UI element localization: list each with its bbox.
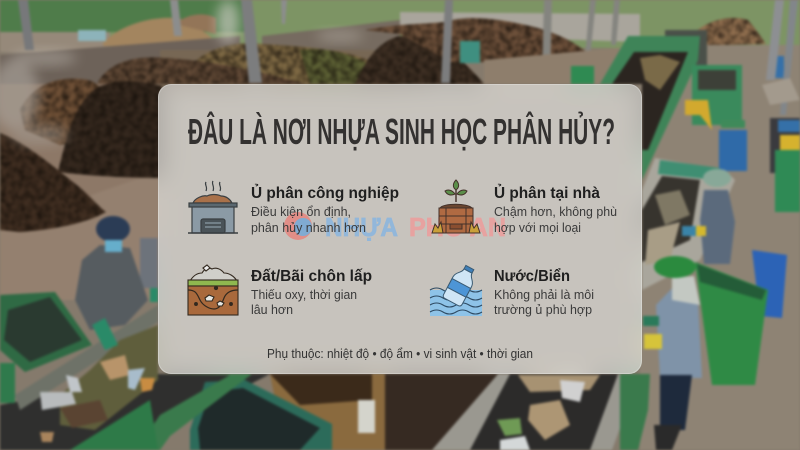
watermark logo: NHỰA [325, 212, 398, 242]
icon: home compost box with sprout [432, 180, 480, 233]
text: water and sea detail: Không phải là môi [494, 288, 594, 302]
heading: industrial composting: Ủ phân công nghiệp [251, 184, 399, 202]
watermark logo: PHỐ AN [409, 212, 506, 242]
heading: home composting: Ủ phân tại nhà [494, 184, 600, 202]
heading: water and sea: Nước/Biển [494, 268, 570, 285]
text: water and sea detail: trường ủ phù hợp [494, 303, 592, 317]
icon: landfill soil cross-section [188, 265, 238, 315]
footer note: Phụ thuộc: nhiệt độ • độ ẩm • vi sinh vật • thời gian [267, 347, 533, 361]
text: soil and landfill detail: lâu hơn [251, 303, 293, 317]
item: soil and landfill [188, 265, 372, 317]
text: home composting detail: hợp với mọi loại [494, 221, 581, 235]
text: home composting detail: Chậm hơn, không phù [494, 205, 617, 219]
icon: industrial composter [188, 181, 238, 233]
panel: frosted glass card [158, 84, 642, 374]
item: water and sea [430, 263, 594, 317]
watermark logo [284, 212, 506, 242]
text: soil and landfill detail: Thiếu oxy, thời gian [251, 288, 357, 302]
heading: soil and landfill: Đất/Bãi chôn lấp [251, 268, 372, 285]
text: industrial composting detail: phân hủy nhanh hơn [251, 221, 366, 235]
text: industrial composting detail: Điều kiện ổn định, [251, 205, 351, 219]
icon: plastic bottle floating in waves [430, 263, 482, 316]
item: industrial composting [188, 181, 399, 235]
item: home composting [432, 180, 617, 235]
